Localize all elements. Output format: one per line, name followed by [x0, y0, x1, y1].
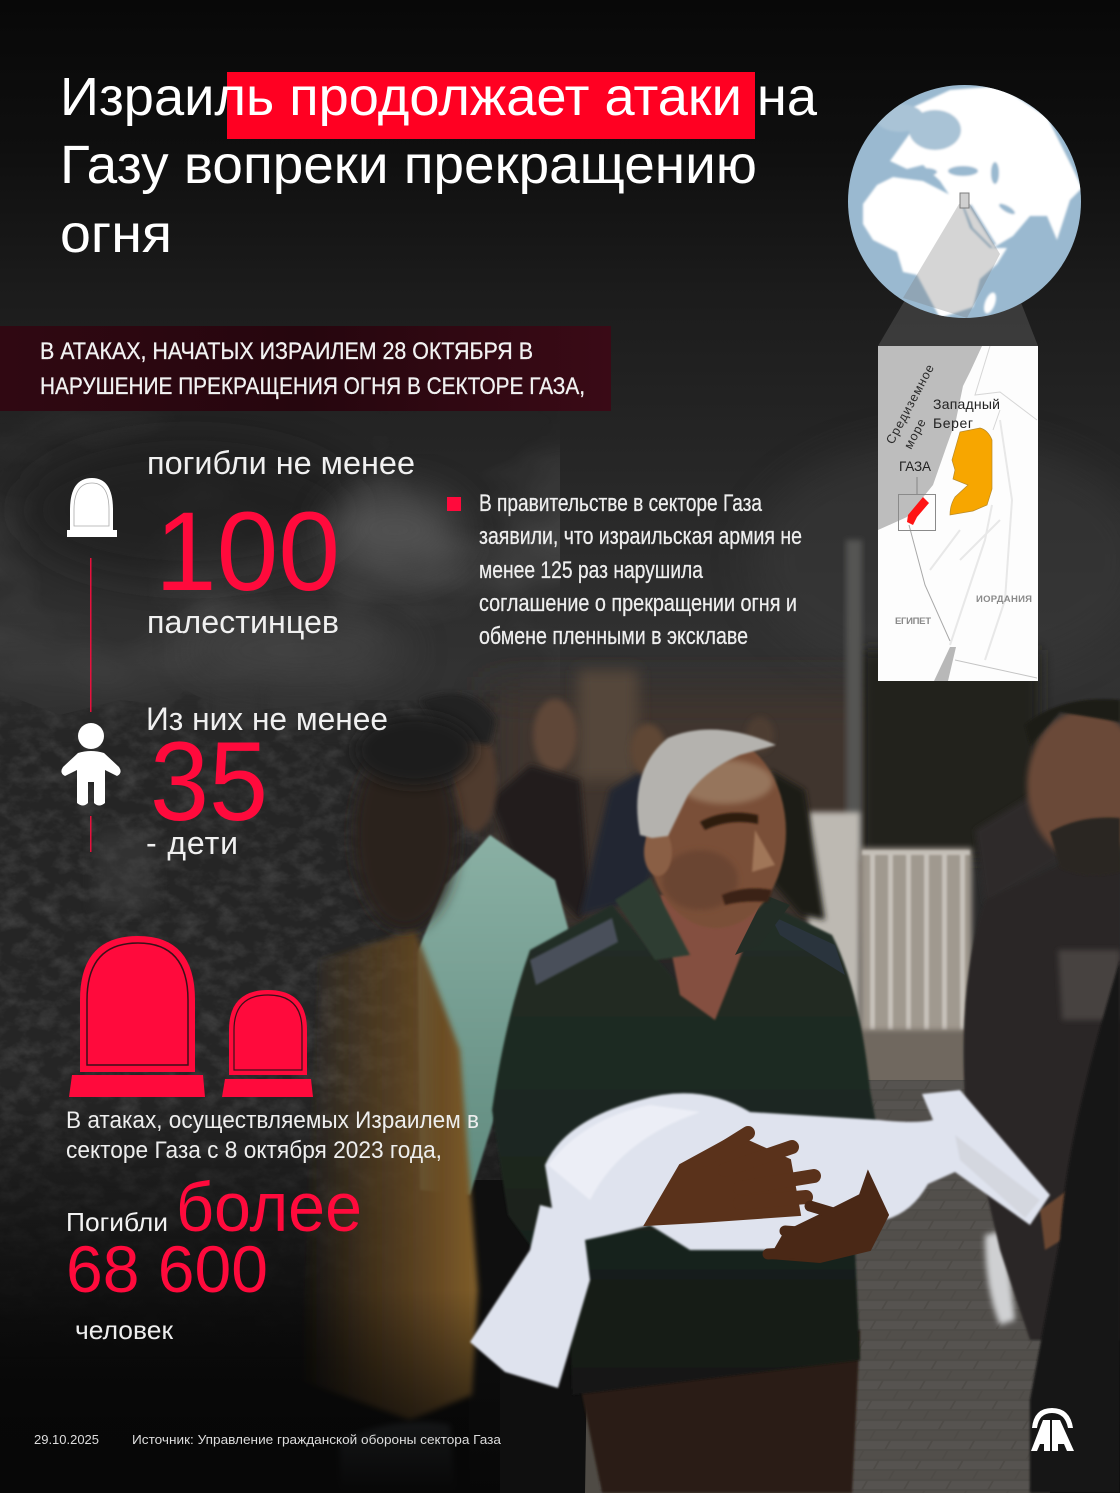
date: 29.10.2025	[34, 1432, 99, 1447]
gaza box	[898, 494, 936, 530]
locator map: ЕГИПЕТ	[895, 616, 931, 627]
locator map: Берег	[933, 415, 973, 431]
photo: old man carrying the shroud	[492, 729, 890, 1493]
bullet text: ceasefire violations: менее 125 раз нарушила	[479, 557, 704, 584]
head	[646, 736, 786, 928]
source: Источник: Управление гражданской обороны сектора Газа	[132, 1432, 502, 1447]
bullet text: ceasefire violations: В правительстве в секторе Газа	[479, 490, 763, 517]
locator map: море	[901, 417, 929, 451]
stat: 100 palestinians: палестинцев	[147, 604, 339, 640]
stat: total deaths since October 2023: Погибли	[66, 1207, 168, 1237]
locator map: ГАЗА	[899, 459, 931, 474]
background: dark photographic backdrop	[0, 185, 1120, 1180]
bullet text: ceasefire violations: соглашение о прекращении огня и	[479, 590, 797, 617]
icon: child	[61, 723, 121, 806]
connector line	[90, 558, 92, 852]
gaza strip	[907, 497, 929, 525]
title	[60, 67, 818, 264]
stat: total deaths since October 2023	[66, 1107, 479, 1345]
bullet text: ceasefire violations	[447, 490, 802, 650]
locator map: Западный	[933, 396, 1000, 412]
locator map: Средиземное	[883, 362, 937, 446]
stat: total deaths since October 2023: 68 600	[66, 1232, 268, 1306]
title: Газу вопреки прекращению	[60, 135, 757, 195]
icon: red tombstones	[69, 936, 313, 1097]
banner: В АТАКАХ, НАЧАТЫХ ИЗРАИЛЕМ 28 ОКТЯБРЯ В	[40, 338, 533, 365]
locator map: ИОРДАНИЯ	[976, 594, 1032, 605]
stat: 100 palestinians	[147, 445, 415, 640]
photo: man in teal shirt	[418, 693, 590, 1493]
west bank	[950, 428, 992, 515]
photo: white shroud	[470, 1090, 1050, 1388]
stat: 35 children: - дети	[146, 825, 238, 861]
locator cone between globe and map	[878, 300, 1038, 346]
globe locator	[845, 82, 1085, 322]
icon: white tombstone	[67, 478, 117, 537]
title: огня	[60, 204, 172, 264]
background: bombed city skyline	[0, 705, 496, 1202]
title: Израиль продолжает атаки на	[60, 67, 818, 127]
photo: man on the right	[964, 699, 1120, 1493]
stat: total deaths since October 2023: В атаках, осуществляемых Израилем в	[66, 1107, 479, 1134]
gulf of aqaba	[934, 647, 956, 681]
stat: total deaths since October 2023: более	[176, 1168, 362, 1246]
photo: people walking behind	[490, 699, 825, 920]
bullet text: ceasefire violations: заявили, что израильская армия не	[479, 523, 802, 550]
stat: total deaths since October 2023: секторе Газа с 8 октября 2023 года,	[66, 1137, 442, 1164]
banner	[0, 326, 611, 411]
stat: 100 palestinians: погибли не менее	[147, 445, 415, 481]
locator map	[878, 346, 1038, 681]
photo: man in ochre jacket	[0, 715, 500, 1493]
photo: distant street background	[490, 540, 1050, 1493]
stat: 100 palestinians: 100	[155, 489, 340, 614]
bullet text: ceasefire violations: обмене пленными в эксклаве	[479, 623, 748, 650]
icon: Anadolu Agency logo	[1031, 1408, 1074, 1451]
photo: weathered hands	[645, 1133, 888, 1262]
stat: 35 children	[146, 701, 388, 861]
stat: total deaths since October 2023: человек	[75, 1315, 174, 1345]
sea	[878, 346, 982, 530]
stat: 35 children: 35	[150, 719, 268, 844]
stat: 35 children: Из них не менее	[146, 701, 388, 737]
banner: НАРУШЕНИЕ ПРЕКРАЩЕНИЯ ОГНЯ В СЕКТОРЕ ГАЗА,	[40, 373, 585, 400]
